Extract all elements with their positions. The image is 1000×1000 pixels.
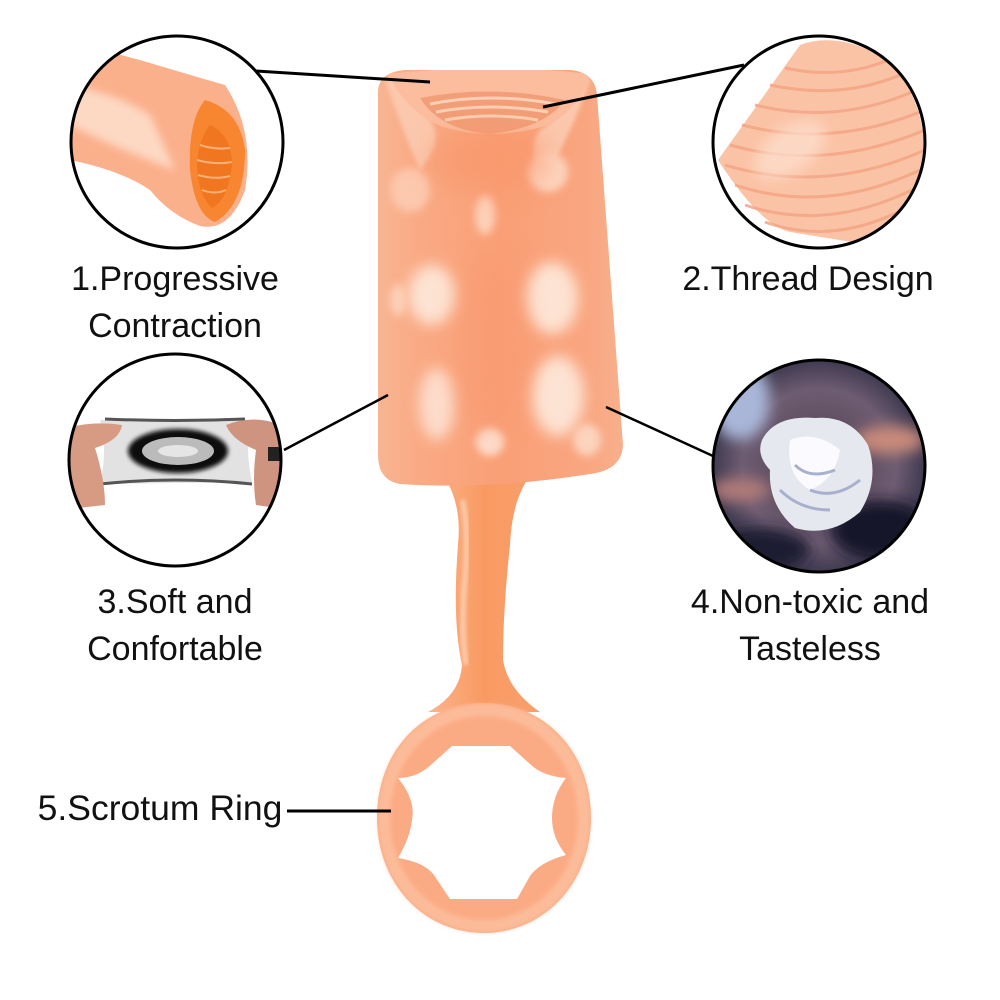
leader line 1 — [256, 71, 430, 82]
heading: 1.Progressive Contraction: 1.Progressive — [71, 260, 279, 298]
ring — [69, 354, 281, 566]
icon: sleeve opening — [72, 54, 248, 227]
leader line 4 — [606, 407, 713, 456]
scrotum ring — [377, 703, 591, 933]
inner opening — [420, 91, 565, 134]
ring shading — [378, 704, 590, 932]
product: sleeve with strap and ring — [377, 68, 623, 933]
heading: 1.Progressive Contraction: Contraction — [88, 307, 262, 345]
top rim — [388, 68, 590, 134]
icon: white flower — [710, 359, 930, 573]
leader line 3 — [284, 395, 388, 450]
panel: non-toxic and tasteless — [710, 359, 930, 573]
leader line 5 — [287, 810, 391, 812]
heading: 5.Scrotum Ring: 5.Scrotum Ring — [38, 788, 282, 828]
mouth highlight: left and right flaps — [385, 75, 436, 170]
strap — [428, 476, 540, 712]
highlights — [408, 265, 456, 325]
ring — [713, 360, 925, 572]
heading: 3.Soft and Confortable: Confortable — [87, 630, 263, 668]
leader line 2 — [543, 65, 744, 107]
panel: progressive contraction — [70, 35, 284, 249]
panel: soft and comfortable — [60, 353, 290, 567]
heading: 4.Non-toxic and Tasteless: Tasteless — [739, 630, 881, 668]
heading: 2.Thread Design: 2.Thread Design — [682, 260, 934, 298]
panel: thread design — [712, 35, 926, 249]
strap highlight — [462, 500, 467, 665]
heading: 4.Non-toxic and Tasteless: 4.Non-toxic and — [691, 583, 929, 621]
heading: 1.Progressive Contraction — [71, 260, 279, 345]
heading: 4.Non-toxic and Tasteless — [691, 583, 929, 668]
ring — [713, 36, 925, 248]
sleeve body — [378, 70, 623, 486]
heading: 3.Soft and Confortable — [87, 583, 263, 668]
ring — [71, 36, 283, 248]
icon: stretched ring between fingers — [70, 418, 280, 508]
icon: ribbed texture — [712, 35, 926, 249]
sleeve details — [385, 68, 601, 456]
heading: 3.Soft and Confortable: 3.Soft and — [97, 583, 253, 621]
